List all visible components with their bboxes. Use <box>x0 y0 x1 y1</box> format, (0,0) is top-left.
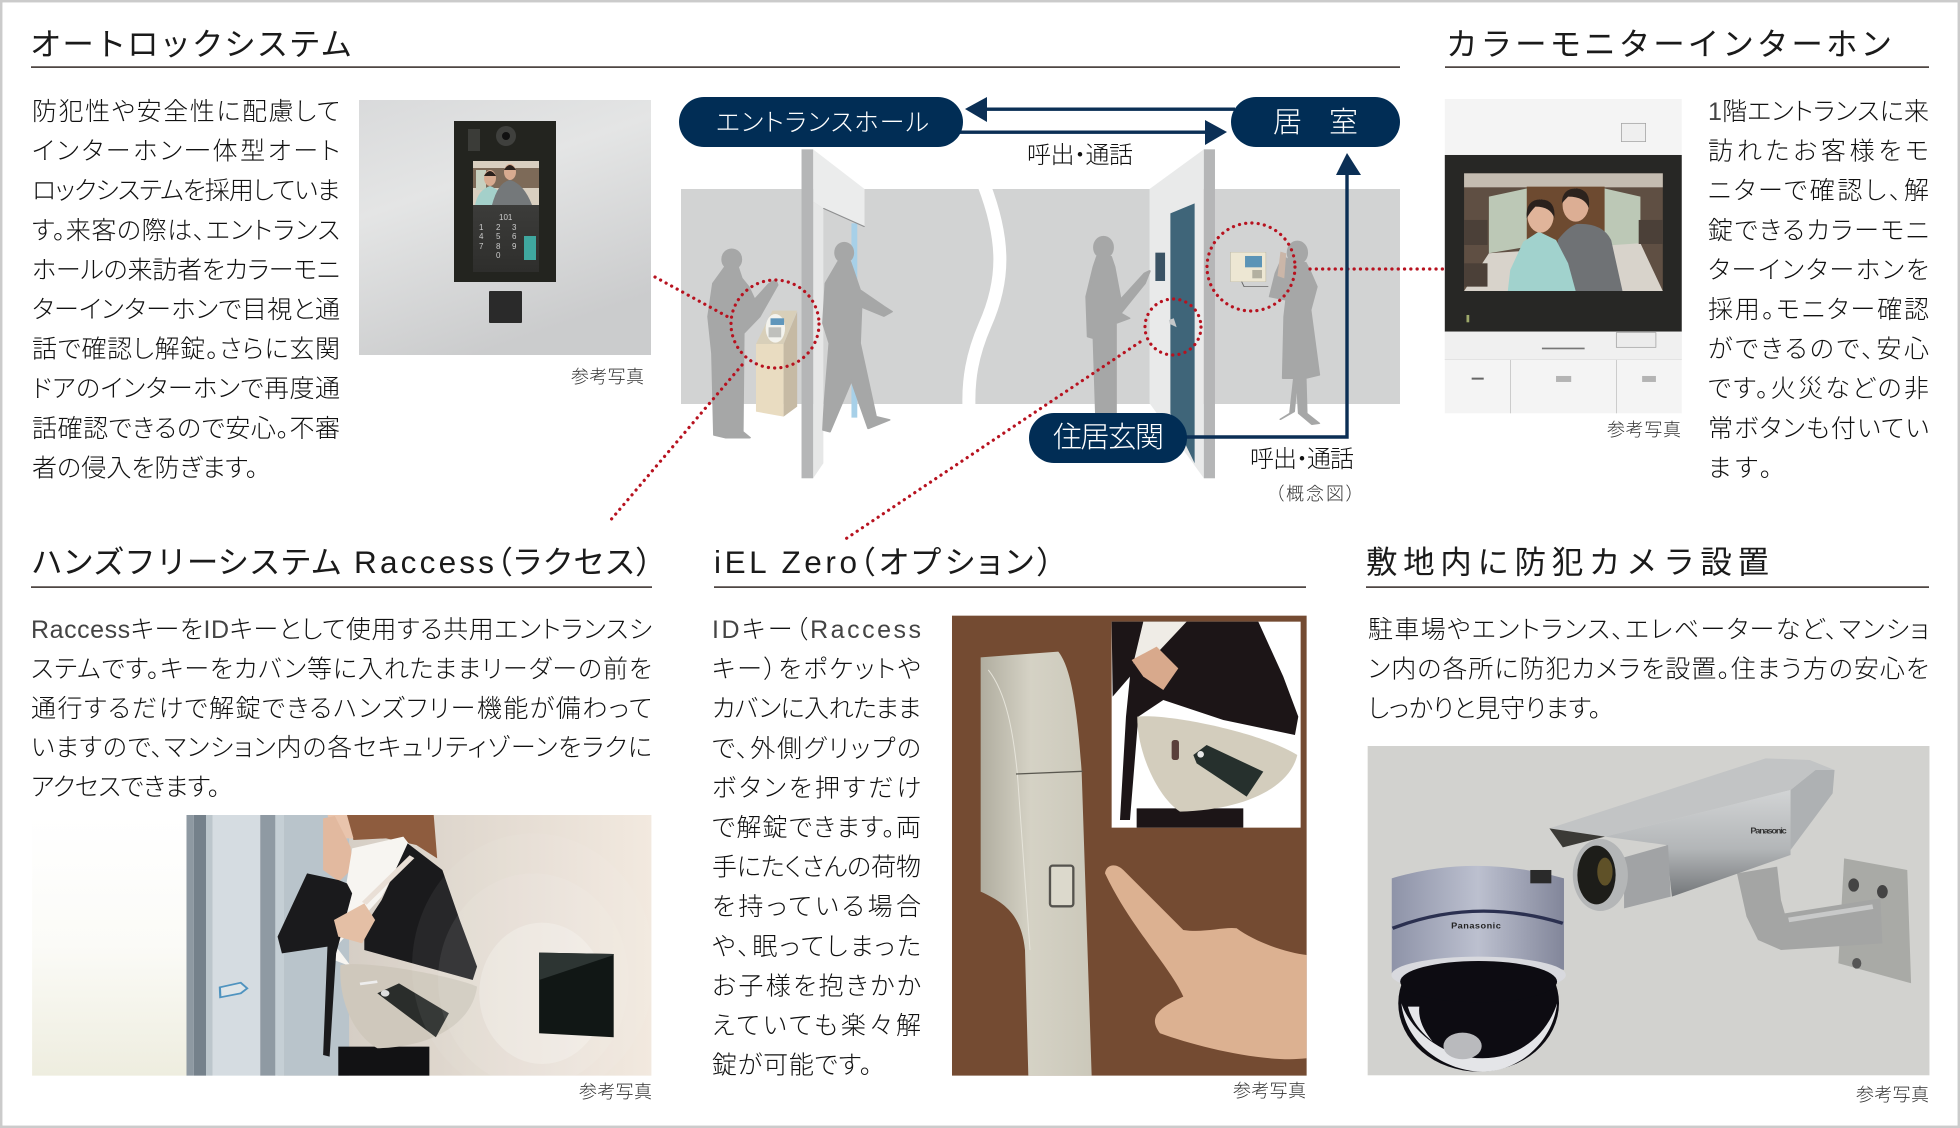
text block: iEL Zero description: や、眠ってしまった <box>712 933 921 961</box>
text block: iEL Zero description: キー）をポケットや <box>712 656 921 684</box>
text block: monitor description: 採用。モニター確認 <box>1708 296 1929 324</box>
label pill: entrance hall <box>679 97 963 147</box>
heading: iEL Zero option <box>714 544 1306 588</box>
silhouette: resident on handset <box>1270 241 1319 424</box>
photo: entrance intercom panel: 7 <box>479 242 484 251</box>
photo: entrance intercom panel: 5 <box>496 232 501 241</box>
label pill: residence room: 居 <box>1273 107 1302 139</box>
photo: woman passing reader with bag <box>32 815 655 1100</box>
caption: reference photo: 参考写真 <box>1856 1085 1929 1105</box>
photo: entrance intercom panel: 4 <box>479 232 484 241</box>
photo: door handle and finger <box>952 616 1307 1076</box>
text block: Raccess description: 通行するだけで解錠できるハンズフリー機能が備わって <box>31 695 652 723</box>
dotted callout circles and connector lines <box>609 223 1445 540</box>
panel: hands-free Raccess <box>31 544 655 1102</box>
heading: hands-free Raccess <box>31 544 652 588</box>
photo: entrance intercom panel: 6 <box>512 232 517 241</box>
text block: camera description <box>1368 616 1929 723</box>
text block: iEL Zero description: お子様を抱きかか <box>712 972 921 1000</box>
photo: entrance intercom panel: 101 <box>499 213 513 222</box>
illustration: residence door and people <box>1087 149 1319 478</box>
dome camera <box>1391 866 1566 1072</box>
hand pressing button <box>1105 865 1307 1059</box>
label pill: residence room: 室 <box>1329 106 1358 139</box>
text block: auto-lock description: ホールの来訪者をカラーモニ <box>32 256 340 284</box>
label: concept diagram note: （概念図） <box>1275 484 1355 504</box>
text block: monitor description: ニターで確認し、解 <box>1708 177 1929 205</box>
inset: bag with key <box>1112 622 1301 828</box>
caption: reference photo: 参考写真 <box>1233 1081 1306 1101</box>
panel: auto-lock system <box>30 26 1400 482</box>
illustration: entrance door and people <box>708 149 892 478</box>
text block: auto-lock description: す。来客の際は、エントランス <box>32 217 340 245</box>
text block: camera description: ン内の各所に防犯カメラを設置。住まう方の安心を <box>1368 655 1929 683</box>
bullet camera: Panasonic <box>1750 826 1787 835</box>
grey background band <box>681 189 1400 404</box>
text block: Raccess description: ステムです。キーをカバン等に入れたままリーダーの前を <box>31 655 652 683</box>
label pill: residence entrance <box>1029 413 1187 463</box>
text block: auto-lock description: 話で確認し解錠。さらに玄関 <box>32 336 340 364</box>
text block: Raccess description: アクセスできます。 <box>31 774 220 802</box>
icon: entrance kiosk <box>756 311 797 417</box>
heading: auto-lock system: オートロックシステム <box>30 26 352 62</box>
caption: reference photo: 参考写真 <box>1607 420 1681 440</box>
text block: iEL Zero description: えていても楽々解 <box>712 1012 921 1040</box>
text block: camera description: 駐車場やエントランス、エレベーターなど、マンショ <box>1368 616 1929 644</box>
photo: security cameras <box>1368 746 1929 1075</box>
label: call and talk upper: 呼出・通話 <box>1027 142 1133 169</box>
text block: monitor description: です。火災などの非 <box>1708 375 1929 403</box>
heading: hands-free Raccess: ハンズフリーシステム <box>31 544 342 580</box>
text block: monitor description: 錠できるカラーモニ <box>1708 217 1929 245</box>
label pill: residence room <box>1231 97 1400 147</box>
text block: iEL Zero description: 錠が可能です。 <box>712 1052 872 1080</box>
photo: entrance intercom panel: 0 <box>496 251 501 260</box>
text block: iEL Zero description: で解錠できます。両 <box>712 814 921 842</box>
heading: iEL Zero option: （オプション） <box>859 544 1053 580</box>
photo: entrance intercom panel: 1 <box>479 223 484 232</box>
photo: room monitor <box>1445 99 1682 413</box>
arrow: entrance hall to residence <box>960 120 1227 145</box>
photo: entrance intercom panel <box>359 100 651 355</box>
arrow: residence to entrance hall <box>965 97 1235 122</box>
photo: entrance intercom panel: 9 <box>512 242 517 251</box>
text block: iEL Zero description: 手にたくさんの荷物 <box>712 854 921 882</box>
silhouette: person walking through door <box>823 243 892 432</box>
heading: hands-free Raccess: （ラクセス） <box>496 544 652 580</box>
shoulder bag with key <box>340 964 477 1048</box>
label: call and talk lower: 呼出・通話 <box>1250 446 1354 473</box>
text block: camera description: しっかりと見守ります。 <box>1368 695 1601 723</box>
text block: iEL Zero description: ボタンを押すだけ <box>712 774 921 802</box>
photo: entrance intercom panel: 3 <box>512 223 517 232</box>
heading: iEL Zero option: iEL Zero <box>714 544 857 580</box>
text block: Raccess description: いますので、マンション内の各セキュリティゾーンをラクに <box>31 734 652 762</box>
text block: monitor description: 訪れたお客様をモ <box>1708 138 1929 166</box>
heading: colour monitor intercom: カラーモニターインターホン <box>1446 26 1892 62</box>
text block: auto-lock description: ロックシステムを採用していま <box>32 177 340 205</box>
text block: auto-lock description: インターホン一体型オート <box>32 138 340 166</box>
heading: security cameras: 敷地内に防犯カメラ設置 <box>1366 544 1769 580</box>
text block: auto-lock description: ターインターホンで目視と通 <box>32 296 340 324</box>
text block: auto-lock description: 者の侵入を防ぎます。 <box>32 454 258 482</box>
icon: room intercom <box>1230 252 1286 287</box>
text block: monitor description <box>1708 98 1929 482</box>
label pill: residence entrance: 住居玄関 <box>1053 421 1164 454</box>
panel: colour monitor intercom <box>1445 26 1929 482</box>
text block: auto-lock description: ドアのインターホンで再度通 <box>32 375 340 403</box>
text block: monitor description: 常ボタンも付いてい <box>1708 415 1929 443</box>
text block: monitor description: ができるので、安心 <box>1708 336 1929 364</box>
silhouette: visitor at kiosk <box>708 249 777 438</box>
caption: reference photo: 参考写真 <box>571 367 644 387</box>
heading: hands-free Raccess: Raccess <box>354 544 494 580</box>
silhouette: visitor at residence door <box>1087 237 1150 413</box>
radio wave rings <box>412 833 655 1100</box>
text block: auto-lock description <box>32 98 340 482</box>
text block: iEL Zero description: を持っている場合 <box>712 893 921 921</box>
photo: entrance intercom panel: 8 <box>496 242 501 251</box>
text block: auto-lock description: 話確認できるので安心。不審 <box>32 415 340 443</box>
text block: monitor description: 1階エントランスに来 <box>1708 98 1929 126</box>
diagram: entrance and residence concept <box>609 97 1445 540</box>
text block: iEL Zero description: カバンに入れたまま <box>712 695 921 723</box>
text block: auto-lock description: 防犯性や安全性に配慮して <box>32 98 340 126</box>
panel: iEL Zero option <box>712 544 1307 1101</box>
icon: wall reader <box>539 953 614 1037</box>
text block: iEL Zero description <box>712 616 921 1080</box>
panel: security cameras <box>1366 544 1929 1105</box>
arrow: residence door to room <box>1185 153 1361 439</box>
caption: reference photo: 参考写真 <box>579 1082 652 1102</box>
dome camera: Panasonic <box>1451 921 1501 931</box>
text block: Raccess description: RaccessキーをIDキーとして使用する共用エントランスシ <box>31 616 652 644</box>
photo: entrance intercom panel: 2 <box>496 223 501 232</box>
text block: monitor description: ます。 <box>1708 454 1772 482</box>
text block: iEL Zero description: IDキー（Raccess <box>712 616 921 644</box>
text block: monitor description: ターインターホンを <box>1708 256 1929 284</box>
bullet camera <box>1549 758 1911 983</box>
woman figure <box>278 815 477 1076</box>
text block: Raccess description <box>31 616 652 802</box>
text block: iEL Zero description: で、外側グリップの <box>712 735 921 763</box>
label pill: entrance hall: エントランスホール <box>716 109 929 137</box>
